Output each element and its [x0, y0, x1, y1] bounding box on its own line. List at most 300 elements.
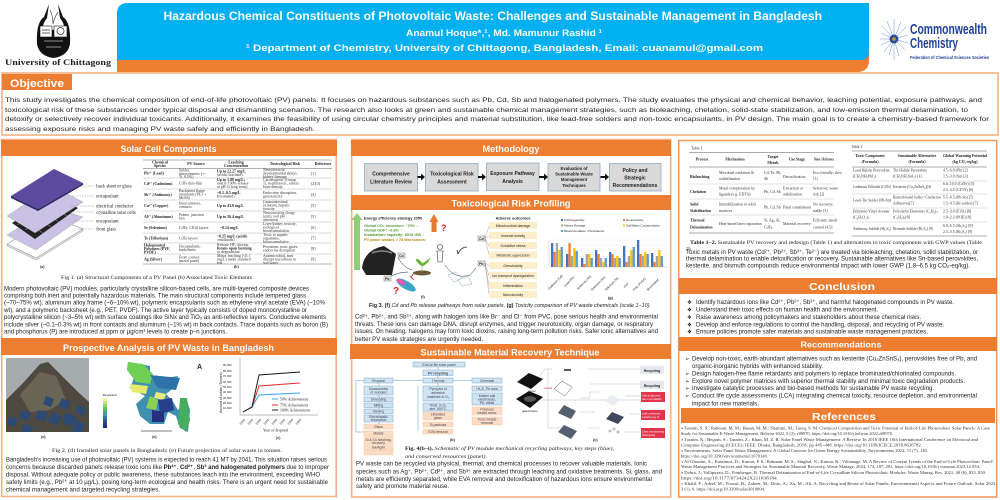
chart: projected PV waste: 10,000: [223, 406, 232, 410]
map: Bangladesh waste by district: A: [197, 364, 202, 371]
diagram: Cd and Pb release pathways: Energy efficiency strategy 2050: [364, 216, 422, 220]
table 2: sustainable alternatives: 6.0–6.5 (Sb₂S₃) [9]: [943, 224, 973, 228]
text: solar cell description: and phosphorus (P) are introduced at ppm or µg/cm³ levels to create p–n junctions.: [4, 329, 227, 336]
table 1: sustainable recovery: Si, Ag, Al,: [764, 218, 780, 224]
table: associated toxic elements: [5]: [311, 204, 316, 208]
diagram: module separation outputs: Glass manufacturing: [642, 430, 665, 434]
table 2: sustainable alternatives: Global Warming Potential: [943, 154, 988, 158]
heading: sustainable material recovery technique: Sustainable Material Recovery Technique: [420, 348, 600, 358]
table: associated toxic elements: Polymers (PVF,: [144, 247, 170, 251]
text: prospective analysis description: safety limits (e.g., Pb²⁺ at 10 µg/L), posing long-term ecological and health risks. There is an urgent need for sustainable: [6, 479, 329, 486]
figure: PV panel layers: crystalline solar cells: [96, 211, 136, 216]
list: recommendations: ➢: [685, 372, 690, 378]
table 2: sustainable alternatives: Ethylene-Vinyl Acetate: [853, 210, 890, 214]
list: conclusion points: Understand their toxic effects on human health and the environment.: [696, 306, 878, 313]
chart: projected PV waste: [219, 358, 318, 440]
title: Hazardous Chemical Constituents of Photovoltaic Waste: Challenges and Sustainable Management in Bangladesh: [164, 11, 822, 23]
table: associated toxic elements: [1]: [311, 172, 316, 176]
diagram: Cd and Pb release pathways: Global GDP: ~6.8% ↑: [364, 228, 402, 232]
table: associated toxic elements: Al³⁺ (Aluminum): [144, 214, 173, 219]
diagram: Cd and Pb release pathways: PV panel wastes > 78 Mio tonnes↑: [364, 237, 427, 242]
diagram: Cd and Pb release pathways: [352, 213, 476, 299]
list: conclusion points: ❖: [687, 300, 692, 306]
list: conclusion points: Develop and enforce regulations to control the handling, disposal, and recycling of PV waste.: [696, 321, 944, 328]
flowchart: recycling pathways: Pb, metal: [480, 401, 494, 405]
chart: projected PV waste: 70,000: [223, 374, 232, 378]
heading: solar cell components: Solar Cell Components: [120, 144, 217, 154]
table 2: sustainable alternatives: Lead-Tin Solder (Pb-Sn): [853, 198, 892, 202]
objective text: [5, 97, 990, 133]
table 1: sustainable recovery: Stabilization: [690, 209, 712, 213]
table: associated toxic elements: Antimicrobial, may: [263, 254, 294, 259]
authors: Anamul Hoque*,¹, Md. Mamunur Rashid ¹: [406, 28, 602, 38]
chart: projected PV waste: 80,000: [223, 369, 232, 373]
table 1: sustainable recovery: control [4,5]: [813, 226, 832, 230]
table: associated toxic elements: [4]: [311, 193, 316, 197]
list: references: https://doi.org/10.3390/environments11070140.: [681, 454, 768, 458]
list: references: [681, 426, 996, 492]
table: associated toxic elements: (acidic leachate): [217, 173, 243, 177]
flowchart: recycling pathways: Milling: [374, 404, 383, 408]
table: associated toxic elements: Interconnects,: [179, 202, 201, 206]
table: associated toxic elements: retardants (PET +: [179, 192, 207, 196]
chart: toxicity comparison: Poly. (PVDF): [632, 277, 647, 292]
table 2: sustainable alternatives: Table 2: [851, 145, 863, 149]
map: Bangladesh waste by district: (d): [152, 435, 157, 439]
table: associated toxic elements: PV Source: [187, 162, 205, 166]
text: tables description: thermal delamination to enable detoxification or recovery. Sustainable alternatives like Sn-based perovskites,: [686, 256, 978, 262]
flowchart: recycling pathways: EVA removal: [428, 430, 448, 434]
list: recommendations: [685, 356, 978, 408]
table 2: sustainable alternatives: (Formula): [861, 160, 879, 164]
chart: toxicity comparison: Carcinogenicity: [564, 218, 585, 222]
table: associated toxic elements: (b): [234, 265, 239, 269]
table: associated toxic elements: test: [217, 261, 223, 265]
heading: solar cell components: [1, 140, 337, 156]
chart: projected PV waste: 2025: [247, 418, 254, 426]
list: conclusion points: Raise awareness among policymakers and stakeholders about these chemical risks.: [696, 314, 921, 321]
list: recommendations: Develop non-toxic, earth-abundant alternatives such as kesterite (Cu₂ZnSnS₄), perovskites free of Pb, and: [692, 356, 978, 362]
table 1: sustainable recovery: Sb: [764, 177, 768, 181]
diagram: module separation outputs: glass/broken: [522, 409, 538, 413]
table: associated toxic elements: Ag (Silver): [144, 258, 163, 262]
table 2: sustainable alternatives: 2.5–3.5 (Bi₂S₃) [9]: [943, 230, 972, 234]
table: associated toxic elements: endocrine disruption: [263, 248, 295, 252]
text: toxicological risk description: issues. On heating, halogens may form toxic dioxins, raising long-term pollution risks. Safer ionic alternatives and: [355, 328, 659, 335]
table 2: sustainable alternatives: (Formula): [908, 160, 926, 164]
table: associated toxic elements: Up to 56.4 mg/L: [217, 215, 244, 219]
flow: methodology steps: Exposure Pathway: [490, 171, 535, 177]
table: associated toxic elements: Endocrine disruption,: [263, 191, 297, 196]
table 2: sustainable alternatives: Tin Halide Perovskite: [893, 168, 927, 172]
flowchart: recycling pathways: Si & Cu leaching,: [365, 438, 392, 442]
figure: PV panel layers: encapsulant: [96, 194, 119, 200]
diagram: module separation outputs: Recycling: [644, 369, 660, 373]
flowchart: recycling pathways: Pyrolysis of: [429, 387, 447, 391]
table 1: sustainable recovery: Material recovery: [783, 222, 811, 226]
list: adverse outcomes: Inflammation: [503, 284, 523, 288]
panel: right column: [679, 140, 997, 497]
table 1: sustainable recovery: Selective; waste: [813, 186, 838, 190]
table 1: sustainable recovery: Table 1.: [691, 146, 704, 150]
list: adverse outcomes: Metabolic oppression: [496, 254, 530, 258]
flowchart: recycling pathways: Thermal: [432, 379, 444, 383]
table 1: sustainable recovery: Extraction or: [783, 186, 804, 190]
table 1: sustainable recovery: Final containment: [783, 206, 812, 210]
table: associated toxic elements: disrupt microbiota in: [263, 258, 296, 262]
list: references: ▪ Al-Ghoufni, A.; Kassimos, D.; Kumar, P. S.; Rahman, M. S.; Singhal, N.; Kumar, R.; Vithanage, M. A Review of Current Trends of the End-of-Life Photovoltaic Panel/: [682, 459, 994, 465]
chart: toxicity comparison: Antimony (Sb): [576, 274, 592, 291]
chart: projected PV waste: 50,000: [223, 385, 232, 389]
text: tables description: Toxic metals in PV waste (Cd²⁺, Pb²⁺, Sb³⁺, Te²⁻) are treated via bioleaching, chelation, solid stabilization, or: [686, 249, 978, 256]
table 1: sustainable recovery: matrices: [719, 209, 733, 213]
list: recommendations: Investigate catalytic processes and bio-based methods for sustainable PV waste recycling.: [692, 385, 934, 392]
panel: objective: [2, 73, 998, 135]
table: associated toxic elements: or degradation: [217, 250, 240, 254]
table: associated toxic elements: Frame, junction: [179, 213, 204, 218]
flowchart: recycling pathways: adhesive: [431, 391, 445, 395]
list: adverse outcomes: Mitochondrial damage: [496, 224, 530, 228]
table: associated toxic elements: toxicity: [263, 207, 275, 211]
flowchart: recycling pathways: Precious: [480, 408, 494, 412]
list: references: Study for Sustainable E-Waste Management. Heliyon 2022, 8 (2), e08970. https://doi.org/10.1016/j.heliyon.2022.e08970.: [681, 431, 893, 437]
table 1: sustainable recovery: Heat-based layer separation: [719, 222, 762, 226]
table 2: sustainable alternatives: Cadmium Telluride (CdTe): [853, 185, 892, 189]
objective text: assessing exposure risks and managing PV waste safely and efficiently in Bangladesh.: [5, 126, 315, 133]
table 2: sustainable alternatives: Kesterite (Cu₂ZnSnS₄)[4]: [893, 185, 931, 189]
chart: toxicity comparison: Tellurium (Te): [604, 276, 619, 292]
table 2: sustainable alternatives: 1.5–4.5 (Bi solder) [7]: [943, 202, 978, 206]
list: conclusion points: ❖: [687, 307, 692, 313]
text: tables description: [686, 246, 978, 270]
table 1: sustainable recovery: Solid: [690, 202, 699, 206]
text: toxicological risk description: [355, 314, 659, 343]
flow: methodology steps: Comprehensive: [372, 172, 410, 178]
table 1: sustainable recovery: stabilization: [783, 192, 802, 196]
logo: Commonwealth Chemistry: [880, 19, 990, 60]
list: adverse outcomes: [478, 216, 537, 298]
caption: figure 2: Fig 2. (d) Installed solar panels in Bangladesh; (e) Future projection of solar waste in tonnes.: [52, 447, 283, 454]
caption: figure 3: Fig 3. (f) Cd and Pb release pathways from solar panels. (g) Toxicity comparison of PV waste chemicals (scale 1−10).: [369, 303, 651, 309]
chart: toxicity comparison: Cadmium (Cd): [547, 274, 564, 291]
table: associated toxic elements: 5i, 0.5%): [179, 175, 194, 180]
table 1: sustainable recovery: Notes / Reference: [814, 158, 834, 162]
table: associated toxic elements: bone density: [263, 185, 283, 189]
text: prospective analysis description: Bangladesh's increasing use of photovoltaic (PV) systems is expected to reach 41 MT by 2041. This situation raises serious: [6, 456, 327, 464]
flow: methodology steps: Evaluation of: [561, 166, 588, 171]
table: associated toxic elements: nearly 100% release: [217, 182, 249, 186]
table 2: sustainable alternatives: Bismuth-based Solder / Conductive: [893, 196, 941, 200]
flowchart: recycling pathways: of modules: [370, 390, 387, 394]
heading: objective: [2, 74, 72, 90]
table: associated toxic elements: backsheets: [179, 248, 196, 252]
chart: projected PV waste: 50% Achievement: [280, 398, 309, 402]
table 1: sustainable recovery: Pb, Cd, Sb: [764, 206, 781, 210]
table 1: sustainable recovery: Metals: [767, 161, 779, 165]
caption: figure 4: [405, 445, 615, 460]
table: associated toxic elements: Front contact: [179, 256, 201, 260]
photo: solar panels waste pile: [6, 358, 89, 439]
diagram: Cd and Pb release pathways: Cd: [399, 254, 404, 258]
chart: toxicity comparison: Lead (Pb): [563, 276, 575, 288]
table 1: sustainable recovery: Thermal: [690, 218, 705, 222]
table: associated toxic elements: Carcinogenic (Group: [263, 178, 296, 182]
flow: methodology steps: Literature Review: [370, 180, 412, 186]
table: associated toxic elements: ecological: [263, 226, 279, 230]
text: toxicological risk description: better PV waste strategies are urgently needed.: [355, 336, 483, 343]
table 1: sustainable recovery: solubilization: [719, 177, 740, 181]
heading: toxicological risk profiling: [351, 195, 671, 210]
heading: sustainable material recovery technique: [350, 344, 671, 359]
table: associated toxic elements: 1), nephrotoxic, affects: [263, 182, 299, 186]
flowchart: recycling pathways: Si particles: [430, 423, 447, 427]
logo: Commonwealth Chemistry: Federation of Chemical Sciences Societies: [910, 55, 990, 60]
flowchart: recycling pathways: metals recov.: [477, 411, 497, 415]
table 2: sustainable alternatives: Adhesives[7]: [893, 202, 914, 206]
list: adverse outcomes: Adverse outcomes: [496, 216, 530, 220]
list: references: ▪ Khalil, F.; Adeel, M.; Yousuf, B.; Zaheer, M.; Dittu, A.; Xu, M.; Ali, A. Recycling and Reuse of Solar Panels: Environmental Aspects and Future Outlook. Solar 2023,: [682, 481, 996, 487]
table 2: sustainable alternatives: Toxic Component: [855, 154, 885, 158]
table: associated toxic elements: Reference: [315, 162, 332, 166]
text: material recovery description: safety and promote material reuse.: [356, 483, 449, 490]
table: associated toxic elements: Encapsulants,: [179, 244, 201, 250]
table: associated toxic elements: ~0.1–0.5 mg/L: [217, 191, 241, 195]
table: associated toxic elements: [5]: [311, 215, 316, 219]
heading: references: References: [812, 411, 876, 423]
flow: methodology steps: Analysis: [502, 179, 523, 185]
table 2: sustainable alternatives: (kg CO₂-eq/kg): [952, 160, 978, 164]
table 2: sustainable alternatives: 6.0–10.0 (CdTe) [5]: [943, 182, 974, 186]
heading: conclusion: Conclusion: [809, 281, 875, 293]
table 1: sustainable recovery: Eco-friendly; slow: [813, 171, 842, 175]
list: adverse outcomes: Neurotoxicity: [503, 293, 523, 297]
table 1: sustainable recovery: Delamination: [690, 226, 713, 230]
list: conclusion points: ❖: [687, 315, 692, 321]
table 1: sustainable recovery: Process: [696, 158, 709, 162]
list: recommendations: Design halogen-free flame retardants and polymers to replace brominated/chlorinated compounds.: [692, 370, 956, 378]
table: associated toxic elements: Liver/kidney toxicity,: [263, 222, 297, 227]
heading: toxicological risk profiling: Toxicological Risk Profiling: [452, 198, 570, 208]
flowchart: recycling pathways: materials in O₂: [427, 395, 450, 399]
heading: conclusion: [679, 278, 997, 294]
table 2: sustainable alternatives: 1.8–2.2 (POE) [8]: [943, 216, 971, 220]
chart: projected PV waste: 20,000: [223, 401, 232, 405]
flowchart: recycling pathways: Sieving: [373, 410, 384, 414]
flow: methodology steps: [364, 163, 661, 191]
list: references: 3 (1), 6. https://doi.org/10.3390/solar3010004.: [681, 486, 765, 492]
table: associated toxic elements: Up to 22.27 mg/L: [217, 170, 246, 174]
chart: toxicity comparison: Bioaccumulation / Persistence: [564, 229, 605, 233]
flowchart: recycling pathways: electrolysis,: [478, 398, 496, 402]
table 1: sustainable recovery: [689, 146, 842, 233]
heading: prospective analysis: [1, 338, 337, 355]
caption: figure 1: Fig 1. (a) Structural Components of a PV Panel (b) Associated Toxic Elements: [61, 274, 252, 281]
flow: methodology steps: Policy and: [622, 168, 648, 174]
panel: middle column: [350, 140, 671, 497]
table 2: sustainable alternatives: 5.5–6.5 (Pb-Sn) [7]: [943, 196, 973, 200]
logo: University of Chittagong: [5, 4, 112, 67]
flow: methodology steps: Sustainable Waste: [555, 172, 594, 176]
text: prospective analysis description: chemical management and targeted recycling strategies.: [6, 486, 160, 494]
table: associated toxic elements: Toxic to aquatic: [263, 233, 288, 237]
chart: projected PV waste: 40,000: [223, 390, 232, 394]
table: associated toxic elements: Gastrointestinal: [263, 200, 288, 204]
table: associated toxic elements: interconnects (<~: [179, 172, 206, 176]
list: adverse outcomes: Ion transport dysregulation: [492, 274, 534, 278]
table: associated toxic elements: ~0.25 mg/L (acidic: [217, 234, 248, 238]
flowchart: recycling pathways: PV recycling: [428, 371, 448, 375]
list: conclusion points: ❖: [687, 322, 692, 328]
chart: projected PV waste: 2050: [287, 418, 294, 426]
text: material recovery description: PV waste can be recycled via physical, thermal, and chemical processes to recover valuable materials. Ionic: [356, 460, 647, 468]
chart: toxicity comparison: Kidney Damage: [564, 224, 586, 228]
flowchart: recycling pathways: (b): [450, 438, 456, 442]
table: associated toxic elements: Te (Tellurium): [144, 236, 169, 240]
chart: projected PV waste: 2045: [279, 418, 286, 426]
table: associated toxic elements: (estimated): [217, 194, 235, 198]
photo: solar panels waste pile: (d): [41, 435, 46, 439]
header banner: [117, 3, 869, 72]
diagram: module separation outputs: Sold at high price: [642, 394, 661, 398]
table: associated toxic elements: [7]: [311, 236, 316, 240]
flowchart: recycling pathways: Disassembly: [369, 387, 388, 391]
table 2: sustainable alternatives: 2.5–3.0 (EVA) [8]: [943, 210, 971, 214]
text: solar cell description: polycrystalline silicon (~3–5% wt) with surface coatings like SiNx and TiO₂ as anti-reflective layers. Conductive elements: [4, 314, 326, 321]
text: toxicological risk description: Cd²⁺, Pb²⁺, and Sb³⁺, along with halogen ions like Br⁻ and Cl⁻ from PVC, pose serious health and environmental: [355, 314, 658, 320]
table 1: sustainable recovery: Efficient; needs: [813, 218, 838, 222]
diagram: module separation outputs: due to recyclability: [642, 398, 662, 401]
table: associated toxic elements: CdTe, CIGS layers: [179, 226, 209, 231]
table: associated toxic elements: conditions): [217, 238, 235, 242]
flowchart: recycling pathways: Shredding: [371, 398, 386, 402]
diagram: module separation outputs: (c): [593, 438, 598, 442]
table: associated toxic elements: term), soil pH: [263, 214, 285, 220]
flowchart: recycling pathways: Electrostatic: [369, 415, 388, 419]
list: recommendations: Explore novel polymer matrices with superior thermal stability and minimal toxic degradation products.: [692, 378, 965, 385]
heading: recommendations: [679, 337, 997, 351]
table 1: sustainable recovery: Detoxification: [783, 175, 806, 179]
chart: projected PV waste: 30,000: [223, 396, 232, 400]
list: adverse outcomes: Immune toxicity: [501, 234, 525, 238]
list: references: ▪ Tasnim, S. S.; Rahman, M. M.; Hasan, M. M.; Shammi, M.; Tareq, S. M. Chemical Composition and Toxic Potential of End-of-Life Photovoltaic Solar Panels: A Case: [682, 426, 990, 432]
diagram: module separation outputs: Recycling: [644, 384, 660, 388]
table 1: sustainable recovery: Target: [768, 155, 779, 159]
table: associated toxic elements: kidney damage: [263, 175, 287, 179]
text: solar cell description: include silver (~0.1–0.3% wt) in front contacts and aluminum (~1% wt) in back contacts. Trace dopants such as boron (B): [4, 322, 328, 328]
chart: projected PV waste: Amount of waste (Tonnes): [219, 372, 223, 413]
list: adverse outcomes: Genotoxicity: [503, 264, 523, 268]
table: associated toxic elements: CdTe thin-film: [179, 182, 202, 186]
table: associated toxic elements: Cd²⁺ (Cadmium): [144, 181, 173, 186]
table: associated toxic elements: Minor leaching (<0.1: [217, 254, 250, 258]
chart: projected PV waste: 2055: [295, 418, 302, 426]
text: material recovery description: [356, 460, 663, 490]
diagram: module separation outputs: downcycling: [642, 434, 656, 437]
table: associated toxic elements: Species: [154, 164, 167, 168]
table 2: sustainable alternatives: (CH₃NH₃PbI₃): [853, 174, 877, 178]
diagram: Cd and Pb release pathways: Installation/ capacity: 8519 GW ↑: [364, 232, 424, 237]
table: associated toxic elements: Backsheet flame: [179, 189, 205, 193]
table: associated toxic elements: irritation, hepatic: [263, 204, 290, 208]
table 2: sustainable alternatives: Sustainable Alternative: [898, 154, 937, 158]
heading: methodology: Methodology: [482, 144, 540, 154]
text: solar cell description: Modern photovoltaic (PV) modules, particularly crystalline silicon-based cells, are multi-layered composite devices: [4, 285, 309, 292]
list: adverse outcomes: Oxidative stress: [501, 244, 526, 248]
map: Bangladesh waste by district: Bangladesh: [103, 393, 117, 397]
flow: methodology steps: Assessment: [437, 180, 467, 186]
heading: prospective analysis: Prospective Analysis of PV Waste in Bangladesh: [63, 343, 274, 353]
diagram: module separation outputs: manual: [544, 386, 553, 390]
table: associated toxic elements: organisms,: [263, 236, 280, 242]
list: references: ▪ Tasnim, K.; Begum, S.; Tasnim, Z.; Khan, M. Z. R. Solar Panel Waste Management: A Review. In 2018 IEEE 10th International Conference on Electrical and: [682, 437, 978, 443]
list: recommendations: ➢: [685, 356, 690, 362]
table: associated toxic elements: bioaccumulation: [263, 229, 289, 233]
list: adverse outcomes: Cd: [479, 237, 484, 241]
diagram: Cd and Pb release pathways: (f): [421, 295, 426, 299]
diagram: Cd and Pb release pathways: ?: [393, 286, 399, 297]
heading: recommendations: Recommendations: [800, 340, 882, 350]
chart: projected PV waste: Year of disposal: [263, 428, 288, 432]
chart: toxicity comparison: Brominated: [646, 278, 660, 292]
text: solar cell description: comprising both inert and potentially hazardous materials. The main structural components include tempered glass: [4, 292, 306, 300]
table: associated toxic elements: Leaching: [228, 160, 244, 164]
flowchart: recycling pathways: recovery: [372, 441, 385, 445]
table: associated toxic elements: at pH 3 (long-term): [217, 185, 248, 189]
table 1: sustainable recovery: Pb, Cd, Sb: [764, 190, 781, 195]
chart: toxicity comparison: (g): [608, 296, 614, 300]
text: prospective analysis description: disposal. Without adequate policy or public awareness, these substances leach into the environment, exceeding WHO: [6, 472, 320, 478]
logo: Commonwealth Chemistry: Chemistry: [910, 36, 958, 52]
flowchart: recycling pathways: Treat. in O₂: [429, 404, 447, 408]
table 2: sustainable alternatives: Bismuth Sulfide (Bi₂S₃) [9]: [893, 227, 933, 231]
table 1: sustainable recovery: Chelation: [690, 190, 707, 194]
table: associated toxic elements: Se (Selenium): [144, 226, 168, 230]
heading: methodology: [351, 140, 671, 156]
table 2: sustainable alternatives: Antimony Sulfide (Sb₂S₃): [853, 227, 892, 231]
table 1: sustainable recovery: Metal complexation by: [719, 186, 755, 190]
diagram: module separation outputs: panel: [529, 389, 536, 393]
table 2: sustainable alternatives: 2.5–3.5 (CZTS) [6]: [943, 188, 973, 192]
table: associated toxic elements: soil/water: [263, 261, 279, 265]
table: associated toxic elements: Persistent, toxic gases,: [263, 245, 298, 250]
logo: University of Chittagong: University of Chittagong: [5, 58, 112, 67]
table: associated toxic elements: Chemical: [152, 160, 169, 164]
chart: toxicity comparison: Soil/Water Contamination: [626, 224, 660, 228]
chart: projected PV waste: 75% Achievement: [280, 404, 309, 408]
table 2: sustainable alternatives: (C₄H₆O₂)ₙ: [853, 216, 870, 220]
table: associated toxic elements: [2][3]: [311, 182, 320, 186]
diagram: Cd and Pb release pathways: ?: [441, 223, 446, 233]
list: conclusion points: [687, 299, 954, 336]
table: associated toxic elements: alteration: [263, 218, 278, 222]
table: associated toxic elements: Neurotoxicity,: [263, 168, 285, 173]
text: solar cell description: wt), and a polymeric backsheet (e.g., PET, PVDF). The active layer typically consists of doped monocrystalline or: [3, 307, 307, 314]
figure: PV panel layers: [7, 169, 136, 269]
diagram: module separation outputs: Sold to refineries,: [642, 412, 661, 416]
diagram: module separation outputs: extracting Ag, Al: [642, 416, 660, 419]
heading: references: [681, 408, 995, 423]
table: associated toxic elements: furans upon burning: [217, 246, 252, 250]
diagram: module separation outputs: [516, 366, 665, 442]
figure: PV panel layers: electrical conductor: [96, 204, 134, 210]
list: references: ▪ Environments. Solar Panel Waste Management: A Global Concern for Green Energy Sustainability. Environments 2022, 11 (7), 140.: [682, 448, 928, 454]
table: associated toxic elements: Concentration: [224, 164, 249, 168]
table: associated toxic elements: CdTe layers: [179, 236, 198, 240]
flow: methodology steps: Management: [561, 177, 588, 182]
flowchart: recycling pathways: Glass: [374, 425, 383, 429]
flow: methodology steps: Techniques: [562, 183, 586, 188]
table: associated toxic elements: Release HF, dioxins,: [217, 243, 249, 248]
